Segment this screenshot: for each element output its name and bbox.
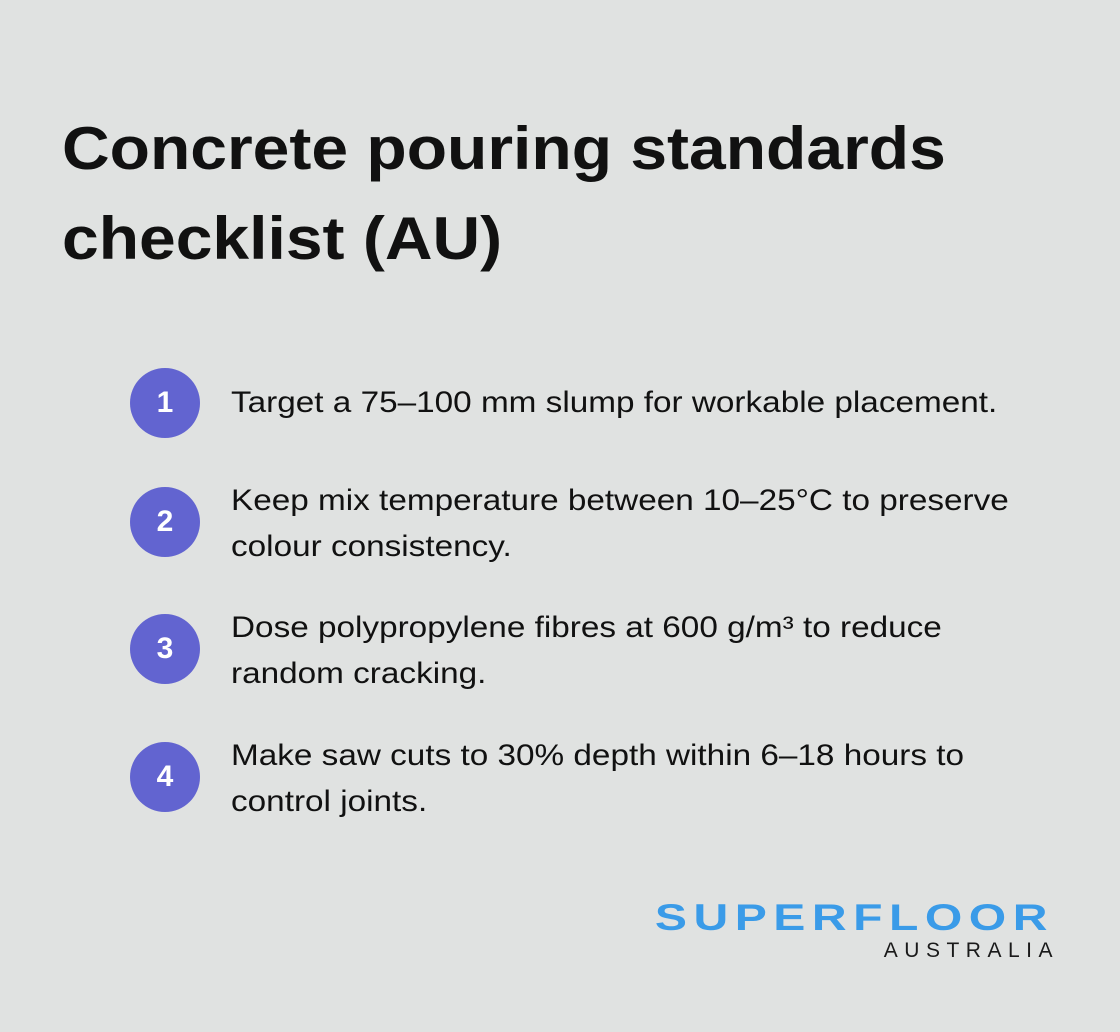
text 3 [231,611,942,690]
badge 4: 4 [157,760,173,793]
text 3: random cracking. [231,657,486,690]
logo: AUSTRALIA [884,939,1059,962]
text 4: control joints. [231,785,427,818]
item 3 [130,611,942,690]
logo [655,897,1059,962]
badge 1 [130,368,200,438]
text 2: Keep mix temperature between 10–25°C to preserve [231,484,1009,517]
title: Concrete pouring standards [62,115,946,182]
badge 2 [130,487,200,557]
text 3: Dose polypropylene fibres at 600 g/m³ to reduce [231,611,942,644]
item 1 [130,368,997,438]
badge 1: 1 [157,386,173,419]
badge 3: 3 [157,632,173,665]
item 2 [130,484,1009,563]
title [62,115,946,272]
text 2: colour consistency. [231,530,512,563]
text 4: Make saw cuts to 30% depth within 6–18 hours to [231,739,964,772]
item 4 [130,739,964,818]
title: checklist (AU) [62,205,502,272]
text 4 [231,739,964,818]
badge 3 [130,614,200,684]
text 2 [231,484,1009,563]
badge 2: 2 [157,505,173,538]
logo: SUPERFLOOR [655,897,1054,938]
text 1: Target a 75–100 mm slump for workable placement. [231,386,997,419]
badge 4 [130,742,200,812]
